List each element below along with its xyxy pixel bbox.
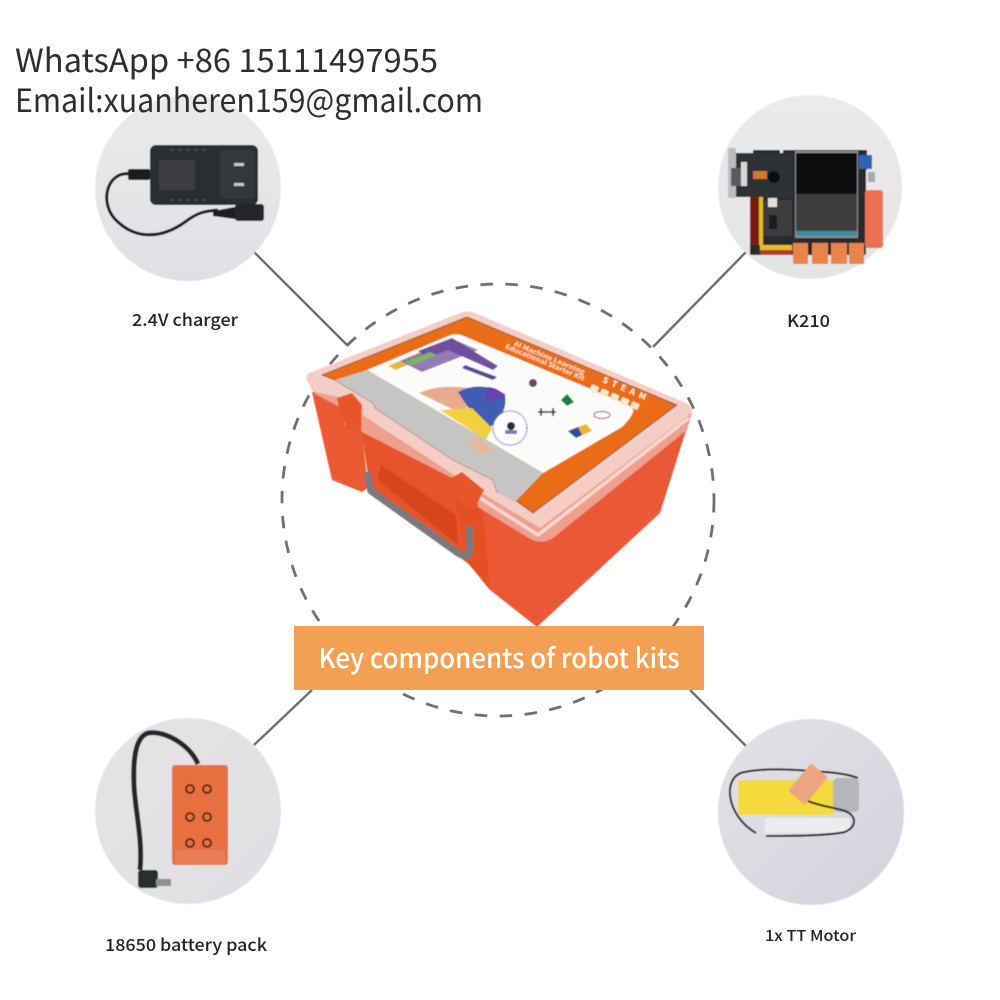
STEAM squares <box>589 384 640 410</box>
character illustration <box>419 386 527 455</box>
charger cable <box>107 174 218 235</box>
banner <box>294 626 704 690</box>
motor can <box>833 778 859 812</box>
potentiometer <box>859 155 872 169</box>
label: battery pack: 18650 battery pack <box>105 931 267 956</box>
box column shadow <box>452 480 490 590</box>
white label area <box>367 334 633 473</box>
battery cable <box>134 733 198 870</box>
label: K210: K210 <box>787 307 830 332</box>
camera module <box>733 153 793 197</box>
gray label strip <box>335 370 543 502</box>
LCD screen <box>795 151 858 238</box>
main board <box>750 165 866 255</box>
box left face <box>312 392 368 492</box>
orange keys <box>793 243 808 264</box>
orange lid label <box>322 317 677 513</box>
gearbox <box>738 780 834 815</box>
connector line: TT motor <box>690 690 746 746</box>
label: charger: 2.4V charger <box>132 306 238 331</box>
connector line: charger <box>254 252 347 345</box>
dashed circle around the kit <box>282 284 714 716</box>
battery body <box>172 765 228 865</box>
clasp right <box>451 472 484 510</box>
STEAM text: STEAM <box>601 374 652 405</box>
handle recess <box>378 465 458 545</box>
clasp left <box>337 393 362 433</box>
motor bracket <box>765 818 850 833</box>
clear lid skirt <box>307 312 692 542</box>
right orange strip <box>865 190 883 248</box>
connector plug <box>788 763 828 805</box>
photo circle: TT motor <box>718 719 904 905</box>
code blocks illustration <box>388 338 498 380</box>
photo circle: charger <box>95 95 281 281</box>
WhatsApp line: WhatsApp +86 15111497955 <box>15 36 438 82</box>
kit box <box>307 312 692 627</box>
label icons <box>529 379 610 438</box>
email line: Email:xuanheren159@gmail.com <box>15 76 483 122</box>
box front panel <box>360 420 470 565</box>
clear lid top <box>307 312 692 528</box>
label title text: AI Machine Learning <box>512 337 587 376</box>
handle <box>367 472 470 556</box>
charger body <box>150 145 258 205</box>
box right face <box>452 418 690 627</box>
photo circle: K210 board <box>718 95 902 279</box>
connector line: battery pack <box>254 690 312 745</box>
banner text: Key components of robot kits <box>318 637 680 676</box>
contact text <box>15 36 483 122</box>
battery plug <box>138 870 158 888</box>
connector line: K210 <box>653 252 746 347</box>
label: TT motor: 1x TT Motor <box>765 925 857 946</box>
headers <box>750 197 758 245</box>
lid highlight <box>480 418 689 535</box>
label title text <box>504 335 589 383</box>
wires <box>730 769 858 833</box>
photo circle: battery pack <box>95 718 281 904</box>
label title text: Educational Starter Kit <box>504 341 587 383</box>
seal badge <box>493 411 527 445</box>
